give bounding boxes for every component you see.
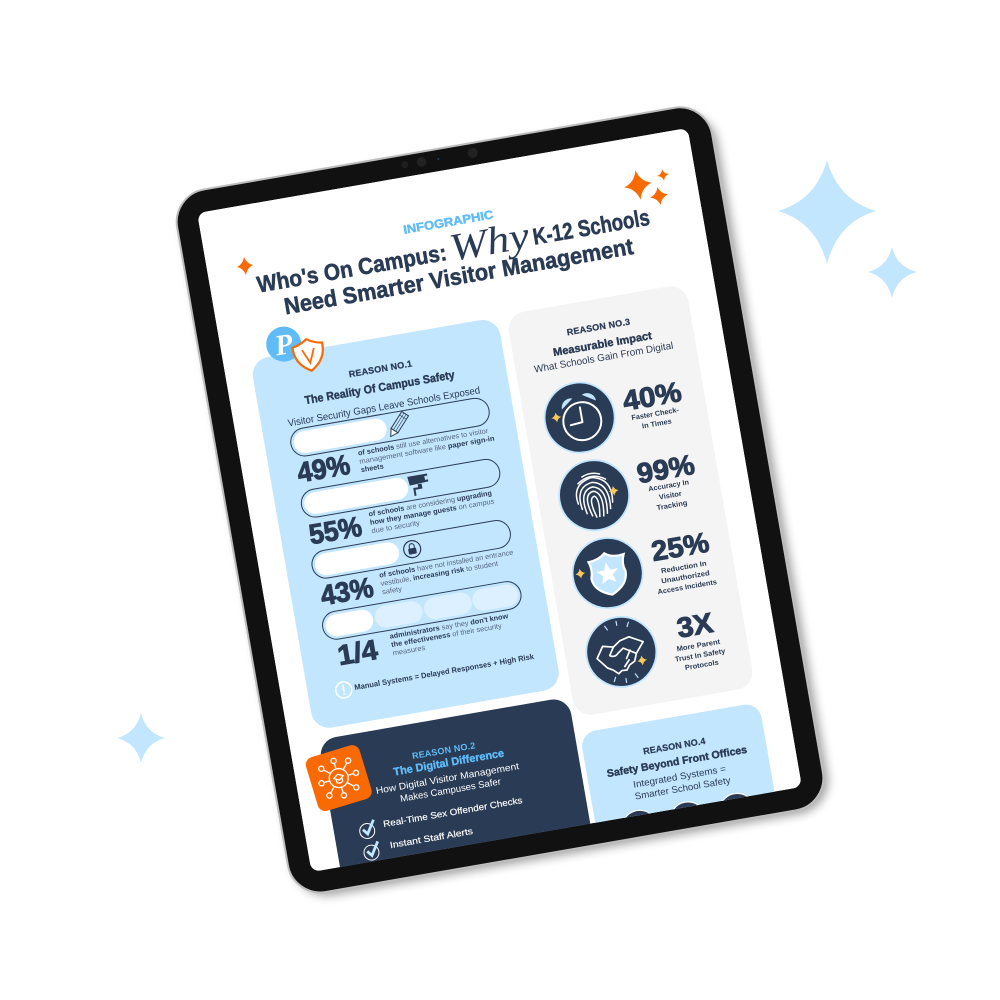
heading: reason 4	[603, 729, 753, 807]
label: parent trust: More Parent	[676, 637, 721, 653]
label: reduction: Unauthorized	[661, 568, 710, 585]
screen	[197, 128, 809, 911]
stat: 99%: 99%	[634, 449, 697, 489]
stat: 3X: 3X	[675, 607, 716, 644]
label: reduction: Access Incidents	[657, 577, 717, 596]
icon: lock	[403, 540, 422, 558]
panel: reason 1	[252, 320, 559, 728]
heading: reason 1: The Reality Of Campus Safety	[304, 369, 456, 407]
heading: reason 3: What Schools Gain From Digital	[533, 341, 674, 376]
label: faster check-in: In Times	[641, 416, 672, 430]
heading: reason 4: Integrated Systems =	[632, 764, 727, 791]
text: 43% description: of schools have not installed an entrance	[378, 547, 514, 580]
heading: reason 3: Measurable Impact	[552, 330, 653, 359]
text: 1/4 description: administrators say they don't know	[389, 611, 509, 641]
text: 1/4 description: measures	[392, 643, 426, 657]
icon: security camera	[407, 474, 430, 497]
sparkle: large blue	[778, 160, 876, 264]
label: faster check-in: Faster Check-	[631, 405, 680, 422]
text: 55% description: of schools are considering upgrading	[368, 488, 492, 519]
heading: reason 4: Smarter School Safety	[634, 775, 732, 803]
text: 49% description: of schools still use alternatives to visitor	[357, 426, 489, 457]
label: accuracy: Tracking	[656, 498, 688, 512]
callout: manual systems: Manual Systems = Delayed Responses + High Risk	[354, 652, 535, 692]
text: 43% description: vestibule, increasing risk to student	[380, 559, 499, 588]
progress bar: 55%	[299, 457, 502, 519]
label: parent trust: Trust In Safety	[674, 646, 726, 664]
icon: pencil	[387, 412, 408, 439]
tablet body	[172, 102, 829, 898]
title: Who's On Campus:	[255, 239, 449, 298]
text: 43% description: safety	[381, 584, 403, 596]
text: 1/4 description	[390, 614, 508, 656]
title: Why	[446, 214, 533, 270]
heading: reason 4: REASON NO.4	[642, 736, 706, 757]
sparkle: orange top-left	[237, 257, 253, 275]
icon: handshake	[585, 616, 658, 688]
progress bar: 43%	[310, 518, 513, 580]
camera array	[401, 147, 479, 170]
stat: 1/4: 1/4	[335, 634, 380, 671]
icon: alert	[335, 681, 353, 699]
stat: 43%: 43%	[318, 572, 376, 611]
progress bar: 49%	[289, 396, 491, 458]
icon: fingerprint	[558, 459, 630, 532]
label: accuracy: Accuracy In	[648, 477, 690, 493]
text: 1/4 description: the effectiveness of their security	[390, 621, 503, 649]
logo: V shield	[291, 338, 324, 372]
check item: staff alerts	[362, 825, 475, 861]
heading: reason 2	[370, 734, 522, 809]
panel: reason 2	[306, 700, 590, 868]
logo: P badge	[266, 326, 301, 362]
stat: 40%: 40%	[620, 376, 684, 417]
heading: reason 2: How Digital Visitor Management	[375, 761, 520, 797]
icon: digital network on orange tile	[304, 743, 374, 813]
heading: reason 1: Visitor Security Gaps Leave Schools Exposed	[287, 385, 481, 429]
sparkle: blue left	[117, 713, 165, 763]
label: faster check-in	[632, 408, 679, 428]
logo: P badge: P	[271, 328, 296, 363]
heading: reason 1	[287, 360, 480, 426]
label: parent trust	[674, 639, 725, 670]
heading: reason 2: REASON NO.2	[411, 740, 476, 761]
heading: reason 3: REASON NO.3	[566, 317, 631, 337]
label: reduction	[658, 562, 717, 594]
heading: reason 1: REASON NO.1	[348, 359, 413, 379]
text: 49% description: sheets	[360, 461, 384, 474]
stat: 55%: 55%	[307, 511, 364, 550]
heading: reason 4: Safety Beyond Front Offices	[606, 744, 748, 780]
panel: reason 4	[580, 702, 781, 861]
sparkles: orange top-right	[622, 168, 670, 206]
title: Need Smarter Visitor Management	[282, 233, 636, 319]
eyebrow: infographic: INFOGRAPHIC	[402, 207, 495, 237]
check item: sex offender checks: Real-Time Sex Offender Checks	[382, 795, 524, 829]
text: 55% description: how they manage guests on campus	[369, 496, 495, 527]
tablet	[172, 102, 835, 914]
label: accuracy	[648, 480, 689, 510]
progress bar: 1 in 4	[320, 579, 523, 641]
title: K-12 Schools	[531, 204, 652, 250]
icon circles	[619, 791, 758, 849]
heading: reason 2: Makes Campuses Safer	[399, 776, 502, 805]
label: reduction: Reduction In	[660, 559, 707, 575]
icon: police badge	[572, 537, 644, 609]
stat: 25%: 25%	[649, 527, 712, 567]
text: 49% description: management software like paper sign-in	[359, 434, 495, 466]
tablet shadow	[178, 108, 833, 901]
panel: reason 3	[506, 284, 755, 718]
text: 55% description: due to security	[371, 518, 421, 535]
label: accuracy: Visitor	[658, 489, 683, 502]
check item: sex offender checks	[358, 794, 525, 840]
icon: alarm clock	[544, 382, 616, 454]
text: 43% description	[380, 550, 513, 594]
heading: reason 2: The Digital Difference	[393, 748, 505, 779]
sparkle: small blue right	[868, 247, 917, 298]
heading: reason 3	[534, 318, 673, 372]
label: parent trust: Protocols	[684, 657, 719, 672]
check item: staff alerts: Instant Staff Alerts	[389, 826, 474, 850]
stat: 49%: 49%	[295, 449, 352, 488]
